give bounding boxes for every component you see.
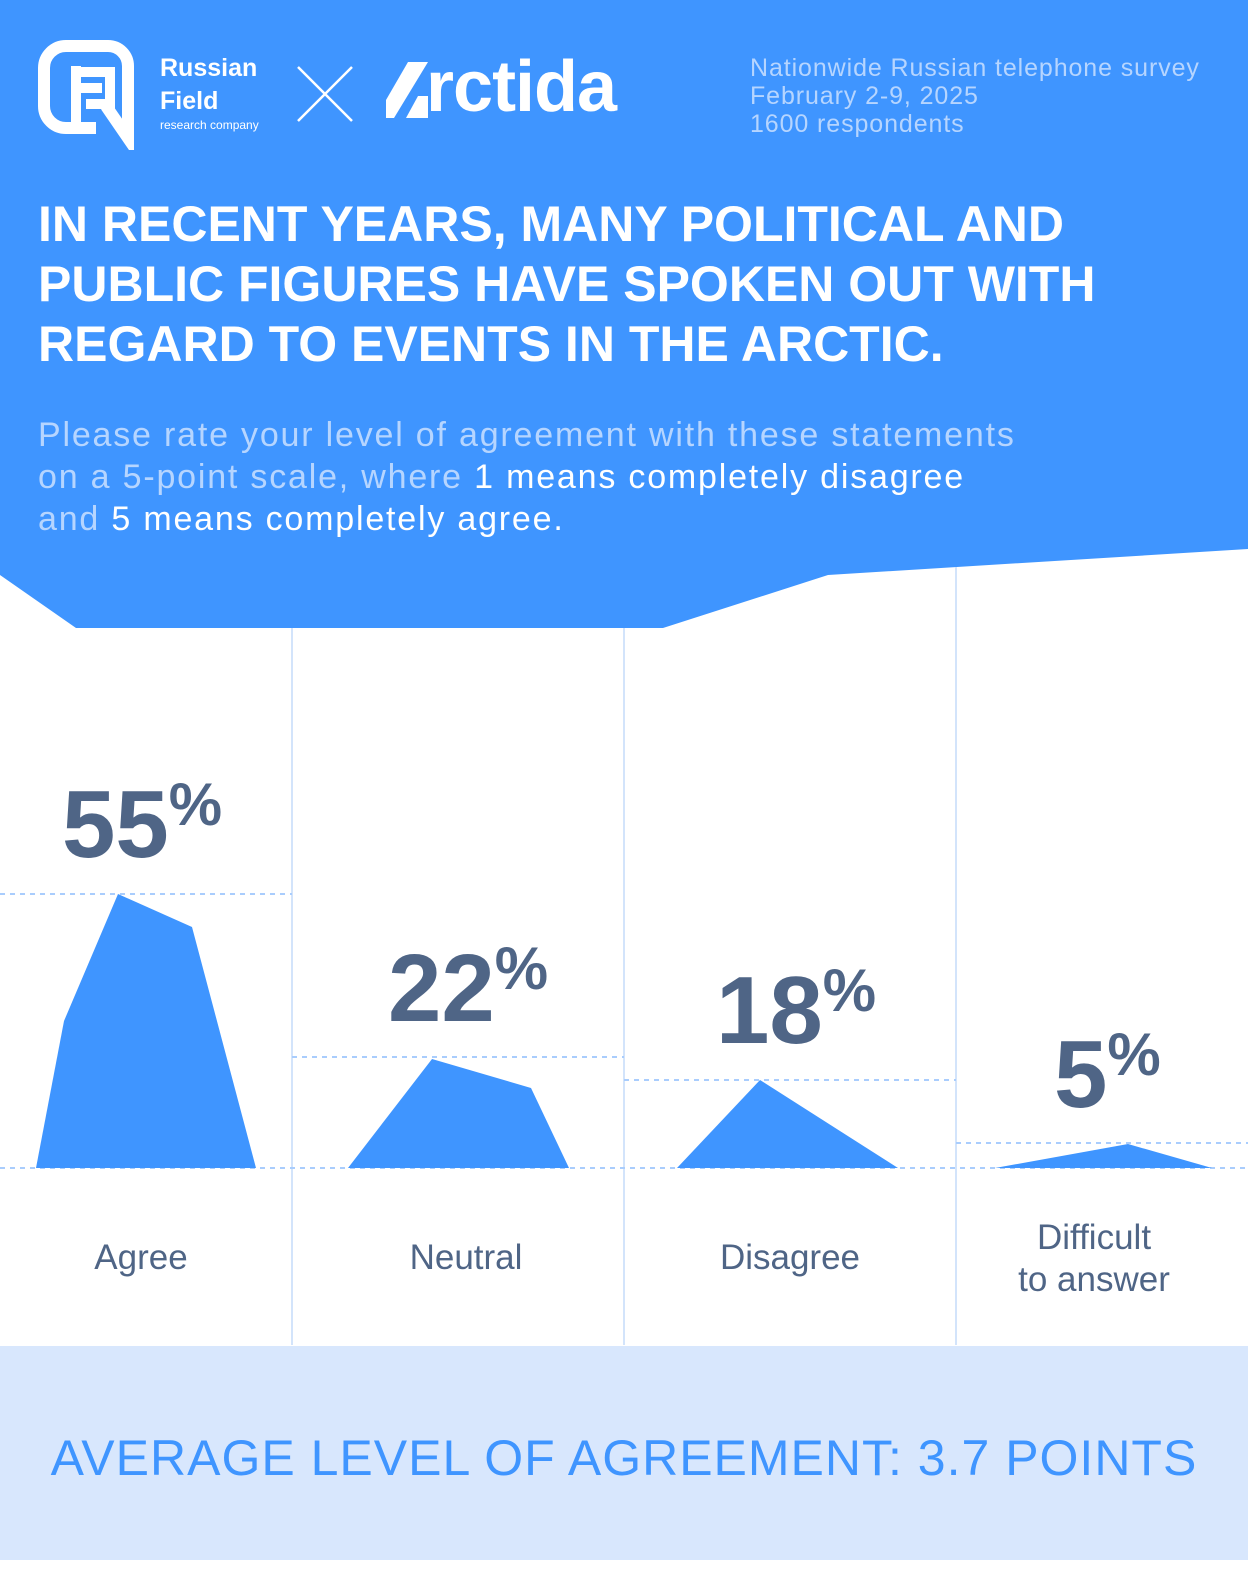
chart: shapes <box>36 894 1212 1168</box>
title: REGARD TO EVENTS IN THE ARCTIC. <box>38 316 944 372</box>
survey info: Nationwide Russian telephone survey <box>750 54 1200 82</box>
logo: Russian Field <box>38 40 259 150</box>
logo: Russian Field: research company <box>160 118 259 132</box>
labels <box>94 1218 1170 1299</box>
value: 18%: 18% <box>716 957 876 1064</box>
logo: Arctida: rctida <box>426 47 616 127</box>
value: 55%: 55% <box>62 771 222 878</box>
logo: Russian Field: Field <box>160 87 218 115</box>
question text <box>38 416 1016 538</box>
footer: average: AVERAGE LEVEL OF AGREEMENT: 3.7 POINTS <box>51 1430 1197 1486</box>
labels: Neutral <box>410 1238 522 1277</box>
survey info <box>750 54 1200 138</box>
labels: to answer <box>1018 1260 1170 1299</box>
labels: Disagree <box>720 1238 860 1277</box>
title: IN RECENT YEARS, MANY POLITICAL AND <box>38 196 1064 252</box>
value: 22%: 22% <box>388 935 548 1042</box>
value: 5%: 5% <box>1054 1021 1161 1128</box>
question text: Please rate your level of agreement with these statements <box>38 416 1016 454</box>
title: PUBLIC FIGURES HAVE SPOKEN OUT WITH <box>38 256 1095 312</box>
survey info: February 2-9, 2025 <box>750 82 979 110</box>
footer: average <box>0 1346 1248 1560</box>
text: Difficult <box>1037 1218 1151 1257</box>
survey info: 1600 respondents <box>750 110 965 138</box>
title <box>38 196 1095 372</box>
logo: Russian Field: Russian <box>160 54 257 82</box>
question text: and 5 means completely agree. <box>38 500 565 538</box>
labels: Agree <box>94 1238 188 1277</box>
question text: on a 5-point scale, where 1 means completely disagree <box>38 458 965 496</box>
icon: cross <box>297 66 353 122</box>
